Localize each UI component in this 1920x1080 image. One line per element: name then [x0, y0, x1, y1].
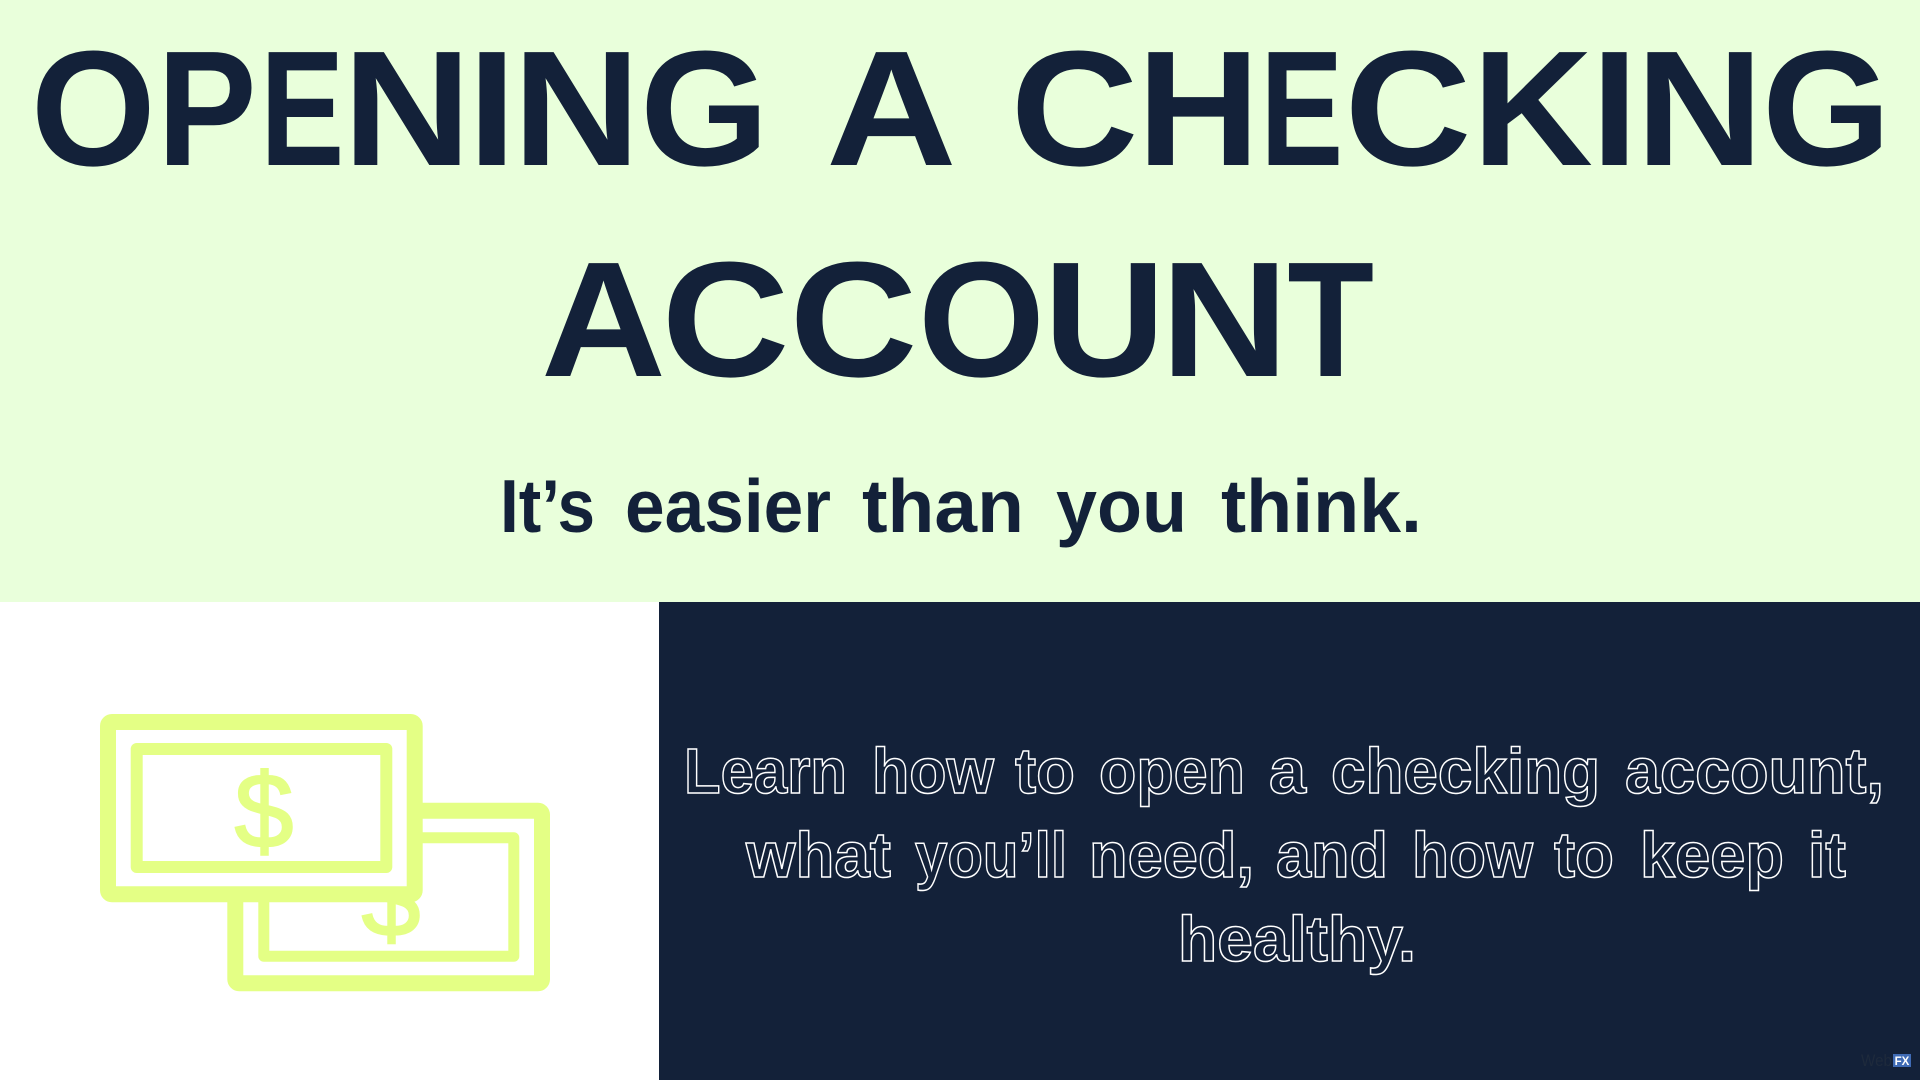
title: K [1472, 17, 1593, 200]
description text: Learn [684, 735, 847, 807]
title: N [342, 17, 472, 200]
description text: how [1412, 819, 1533, 891]
title: P [157, 17, 257, 200]
title: I [1591, 17, 1638, 200]
subtitle: you [1056, 464, 1187, 548]
description text: what [745, 819, 891, 891]
watermark: WebFX logo: Web [1861, 1051, 1892, 1070]
description text: open [1099, 735, 1245, 807]
title: I [468, 17, 516, 200]
panel: white icon background [0, 602, 659, 1080]
panel: header background [0, 0, 1920, 602]
description text: it [1808, 819, 1846, 891]
title: O [918, 228, 1045, 411]
icon: front bill [108, 722, 415, 894]
title: C [790, 228, 918, 411]
title: A [541, 228, 666, 411]
title: N [1161, 228, 1288, 411]
watermark: WebFX logo: FX [1895, 1056, 1910, 1068]
title: U [1044, 228, 1165, 411]
icon: back bill: $ [362, 841, 420, 959]
description text: keep [1640, 819, 1784, 891]
description text: and [1276, 819, 1388, 891]
description text: to [1554, 819, 1614, 891]
description text: account, [1625, 735, 1884, 807]
subtitle: think. [1221, 464, 1422, 548]
title: E [1260, 17, 1343, 200]
title: C [662, 228, 790, 411]
description text: a [1269, 735, 1306, 807]
title: G [640, 17, 769, 200]
description text: checking [1331, 735, 1600, 807]
icon: back bill [235, 811, 542, 983]
title [31, 17, 1891, 411]
icon: money bills [108, 722, 542, 983]
title: C [1010, 17, 1138, 200]
title: N [513, 17, 640, 200]
subtitle: easier [625, 464, 831, 548]
description text [684, 735, 1884, 975]
description text: how [872, 735, 994, 807]
icon: front bill: $ [235, 752, 293, 870]
title: C [1344, 17, 1472, 200]
title: O [31, 17, 156, 200]
title: A [826, 17, 953, 200]
description text: need, [1089, 819, 1254, 891]
title: H [1137, 17, 1260, 200]
description text: to [1015, 735, 1075, 807]
description text: healthy. [1178, 903, 1416, 975]
subtitle: than [862, 464, 1024, 548]
title: G [1762, 17, 1891, 200]
title: E [260, 17, 344, 200]
title: T [1287, 228, 1374, 411]
title: N [1636, 17, 1764, 200]
panel: navy description background [659, 602, 1920, 1080]
watermark: WebFX logo [1861, 1051, 1911, 1070]
subtitle: It’s [500, 464, 595, 548]
description text: you’ll [915, 819, 1067, 891]
